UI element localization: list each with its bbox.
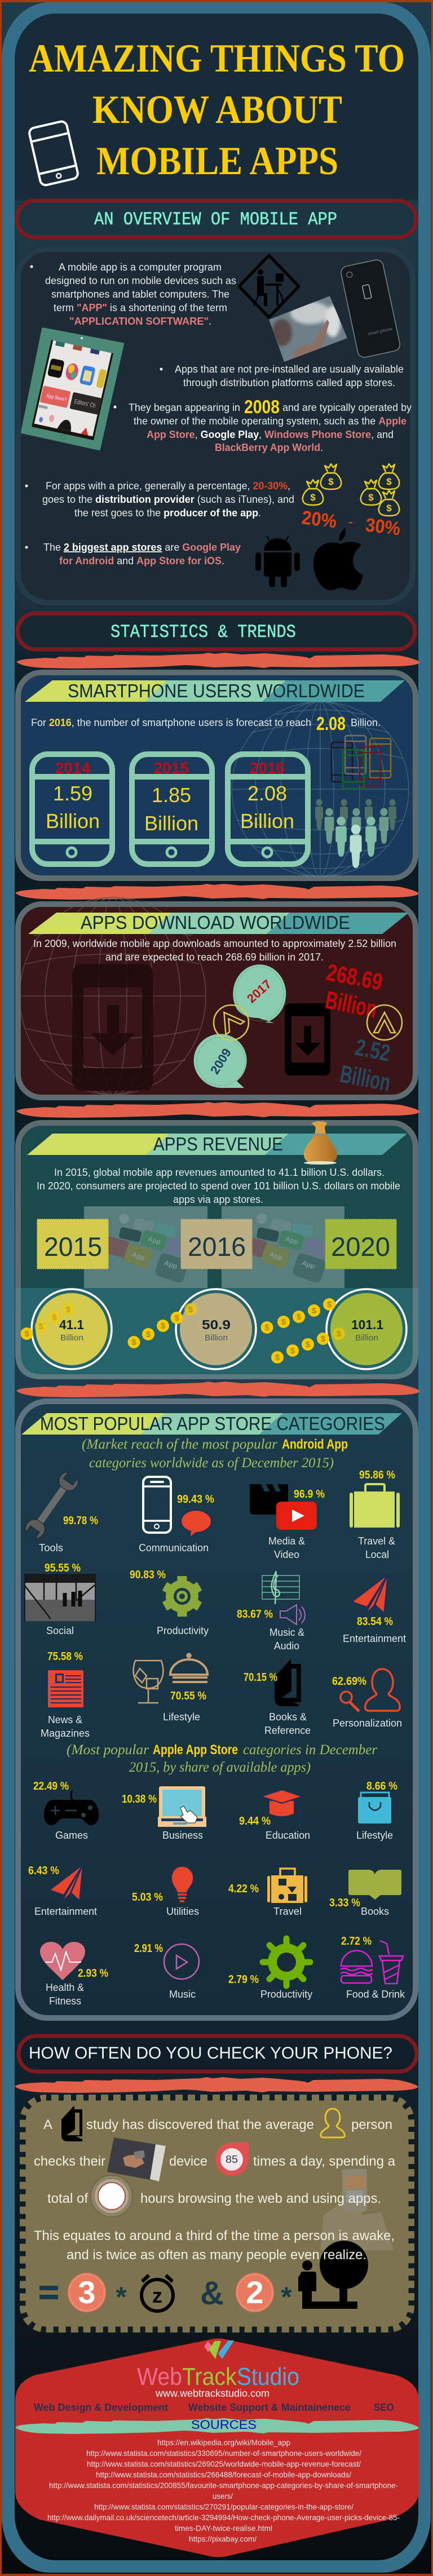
coins: dollar rows: $ xyxy=(275,1353,280,1362)
icon: orange money sack xyxy=(304,1121,337,1165)
icon: large phone with download arrow xyxy=(72,964,153,1091)
sentence line 3 with clock: total of xyxy=(47,2191,88,2206)
image: app keys 2: App xyxy=(285,1235,299,1246)
title line 3: MOBILE APPS xyxy=(96,139,338,183)
text block: definition: designed to run on mobile devices such as xyxy=(45,275,236,286)
ribbon heading: MOST POPULAR APP STORE CATEGORIES xyxy=(40,1413,385,1434)
icon: money bags and percentages: 30% xyxy=(364,514,401,539)
stat: 2.52 billion: Billion xyxy=(338,1060,393,1097)
item: travel apple: Travel xyxy=(273,1906,302,1917)
item: entertainment android xyxy=(343,1574,406,1644)
circle stat: 50.9 billion: Billion xyxy=(205,1333,228,1343)
balloon icon xyxy=(320,2241,368,2289)
forecast sentence xyxy=(31,713,381,734)
image: hand touching tablet xyxy=(269,296,347,366)
item: travel and local xyxy=(350,1469,400,1560)
text block: pricing: For apps with a price, generally a percentage, 20-30%, xyxy=(46,480,290,492)
title block xyxy=(29,37,405,183)
forecast sentence: Billion. xyxy=(351,717,381,728)
ribbon heading: APPS REVENUE xyxy=(153,1134,283,1154)
item: music apple: Music xyxy=(169,1989,196,2000)
item: games xyxy=(33,1780,99,1841)
title line 2: KNOW ABOUT xyxy=(92,88,342,132)
item: media and video: Video xyxy=(274,1549,299,1560)
sentence line 2 with icons xyxy=(34,2137,396,2181)
item: books and reference xyxy=(244,1659,311,1736)
item: music apple xyxy=(134,1942,199,2000)
year tag: 2015: 2015 xyxy=(44,1232,102,1262)
divider brush xyxy=(16,1102,420,1118)
coins: dollar rows: $ xyxy=(38,1322,43,1331)
item: utilities xyxy=(132,1866,199,1917)
icon: phone with download arrow xyxy=(285,1003,330,1075)
heading pill: statistics: STATISTICS & TRENDS xyxy=(111,622,296,643)
equation: 2 xyxy=(246,2274,264,2310)
revenue sentence: apps via app stores. xyxy=(173,1194,263,1205)
bubble: 2009 xyxy=(194,1034,247,1088)
services: Website Support & Maintainenece xyxy=(188,2402,351,2413)
item: productivity android: 90.83 % xyxy=(130,1569,166,1581)
icon: money bags and percentages: $ xyxy=(386,503,392,514)
item: travel and local: Travel & xyxy=(358,1535,395,1547)
coins: dollar rows: $ xyxy=(24,1329,29,1339)
year tag: 2016 xyxy=(181,1219,252,1269)
circle stat: 41.1 billion xyxy=(32,1289,112,1369)
sentence line 2 with icons: device xyxy=(169,2154,207,2169)
sentence line 3 with clock xyxy=(47,2175,381,2217)
item: tools: 99.78 % xyxy=(63,1515,98,1527)
item: health and fitness: 2.93 % xyxy=(78,1967,108,1980)
sentence line 2 with icons: times a day, spending a xyxy=(253,2154,396,2169)
text block: history 2008: App Store, Google Play, Windows Phone Store, and xyxy=(147,429,394,440)
sentence line 2 with icons: checks their xyxy=(34,2154,105,2169)
image: app keys 1: App xyxy=(164,1259,178,1271)
circle stat: 50.9 billion: 50.9 xyxy=(202,1317,231,1332)
phone stat: 2015: 2015 xyxy=(154,759,189,777)
equation: * xyxy=(116,2281,127,2313)
sources list xyxy=(47,2438,400,2543)
item: personalization: Personalization xyxy=(333,1718,402,1729)
sources list: http://www.dailymail.co.uk/sciencetech/article-3294994/How-check-phone-Average-user-picks-device-85- xyxy=(47,2513,400,2522)
item: productivity android: Productivity xyxy=(157,1625,209,1636)
circle stat: 50.9 billion xyxy=(176,1289,256,1369)
subtitle: android: Android App xyxy=(282,1437,348,1452)
revenue sentence: In 2020, consumers are projected to spend over 101 billion U.S. dollars on mobile xyxy=(37,1180,400,1192)
item: music and audio: 83.67 % xyxy=(237,1608,273,1621)
coins: dollar rows: $ xyxy=(146,1330,151,1339)
phone stat: 2014 xyxy=(32,754,112,864)
item: tools xyxy=(23,1470,98,1553)
item: books apple xyxy=(329,1870,401,1917)
item: health and fitness: Fitness xyxy=(49,1995,81,2007)
coins: dollar rows: $ xyxy=(290,1346,295,1356)
item: communication xyxy=(139,1477,214,1553)
sentence line 1 with icons xyxy=(43,2105,392,2141)
sources list: times-DAY-twice-realise.html xyxy=(175,2524,272,2533)
subtitle: android: (Market reach of the most popular xyxy=(82,1437,277,1452)
image: app keys 2: App xyxy=(301,1259,316,1271)
phone stat: 2016 xyxy=(228,754,308,864)
text block: biggest stores: for Android and App Store for iOS. xyxy=(59,555,224,566)
phone stat: 2016: 2.08 xyxy=(248,782,287,805)
services xyxy=(34,2402,394,2413)
forecast sentence: 2.08 xyxy=(316,713,346,734)
text block: pricing: goes to the distribution provider (such as iTunes), and xyxy=(42,494,294,505)
sentence line 4: This equates to around a third of the time a person is awake, xyxy=(34,2228,395,2243)
sources list: http://www.statista.com/statistics/266488/forecast-of-mobile-app-downloads/ xyxy=(96,2470,351,2479)
coins: dollar rows: $ xyxy=(297,1312,302,1322)
item: food and drink: Food & Drink xyxy=(346,1989,405,2000)
item: personalization xyxy=(332,1669,402,1729)
image: app keys 1 xyxy=(84,1206,207,1288)
item: books apple: Books xyxy=(361,1906,389,1917)
item: business: Business xyxy=(162,1830,203,1841)
image: green tablet showing app store: Editors' Ch xyxy=(74,398,96,410)
item: health and fitness xyxy=(40,1942,108,2007)
item: communication: 99.43 % xyxy=(177,1493,214,1506)
text block: biggest stores xyxy=(25,542,241,566)
sentence line 3 with clock: hours browsing the web and using apps. xyxy=(140,2191,381,2206)
equation xyxy=(39,2273,292,2313)
coins: dollar rows: $ xyxy=(52,1313,57,1322)
coins: dollar rows: $ xyxy=(281,1317,286,1327)
icon: yellow up chevron left xyxy=(214,1005,249,1040)
circle stat: 41.1 billion: 41.1 xyxy=(59,1317,84,1332)
circle stat: 101.1 billion: Billion xyxy=(355,1333,378,1343)
text block: app stores: Apps that are not pre-installed are usually available xyxy=(175,364,404,375)
item: education: Education xyxy=(266,1830,310,1841)
item: travel and local: 95.86 % xyxy=(359,1469,395,1481)
image: green tablet showing app store: App Store? xyxy=(46,393,67,402)
coins: dollar rows: $ xyxy=(327,1300,332,1309)
logo wordmark: WebTrackStudio xyxy=(137,2363,299,2391)
year tag: 2020: 2020 xyxy=(331,1232,390,1262)
divider brush xyxy=(16,1382,420,1397)
item: business xyxy=(122,1786,206,1841)
item: productivity apple: 2.79 % xyxy=(228,1973,259,1986)
lower band xyxy=(15,1288,418,1379)
item: media and video: 96.9 % xyxy=(294,1488,325,1501)
text block: history 2008: and are typically operated by xyxy=(282,402,412,413)
sentence line 5: and is twice as often as many people even realize. xyxy=(67,2247,366,2263)
text block: pricing: the rest goes to the producer of the app. xyxy=(74,507,261,519)
sentence line 1 with icons: A xyxy=(43,2117,52,2132)
subtitle: android xyxy=(82,1437,348,1471)
ribbon heading: SMARTPHONE USERS WORLDWIDE xyxy=(68,680,365,701)
revenue sentence xyxy=(37,1167,400,1205)
stat: 2.52 billion xyxy=(338,1034,393,1097)
coins: dollar rows: $ xyxy=(312,1306,317,1316)
text block: history 2008: the owner of the mobile operating system, such as the Apple xyxy=(134,415,407,427)
logo mark xyxy=(204,2340,234,2359)
icon: warning sign with person at desk xyxy=(239,255,299,317)
item: music and audio: Music & xyxy=(269,1627,304,1638)
item: communication: Communication xyxy=(139,1542,209,1553)
coins: dollar rows: $ xyxy=(66,1305,71,1314)
item: media and video: Media & xyxy=(268,1535,305,1547)
globe backdrop xyxy=(232,702,409,877)
item: news and magazines: 75.58 % xyxy=(47,1650,83,1663)
text block: pricing xyxy=(25,480,294,519)
item: books apple: 3.33 % xyxy=(329,1897,360,1909)
item: utilities: 5.03 % xyxy=(132,1891,163,1904)
divider brush xyxy=(15,2077,418,2093)
icon: money bags and percentages: $ xyxy=(386,476,392,487)
circle stat: 41.1 billion: Billion xyxy=(60,1333,83,1343)
panel: apps revenue xyxy=(15,1121,418,1379)
revenue sentence: In 2015, global mobile app revenues amounted to 41.1 billion U.S. dollars. xyxy=(54,1167,385,1178)
phone stat: 2015: 1.85 xyxy=(152,784,191,807)
phone stat: 2014: 1.59 xyxy=(53,782,92,805)
icon: money bags and percentages: $ xyxy=(310,492,316,503)
phone stat: 2016: Billion xyxy=(240,809,294,833)
sources list: http://www.statista.com/statistics/270291/popular-categories-in-the-app-store/ xyxy=(94,2502,354,2511)
image: app keys 2: App xyxy=(268,1250,284,1262)
bubble: 2009: 2009 xyxy=(207,1046,234,1077)
coins: dollar rows: $ xyxy=(131,1338,136,1347)
image: black smartphone back xyxy=(340,259,401,358)
equation: & xyxy=(200,2275,224,2312)
panel: apps download xyxy=(18,897,416,1097)
item: entertainment android: 83.54 % xyxy=(357,1615,393,1628)
panel: most popular categories xyxy=(18,1401,416,2018)
text block: definition: A mobile app is a computer program xyxy=(59,262,222,273)
website: www.webtrackstudio.com xyxy=(155,2388,269,2399)
divider brush xyxy=(15,884,419,900)
item: travel apple xyxy=(228,1869,307,1917)
icon: money bags and percentages: $ xyxy=(328,476,334,487)
coins: dollar rows: $ xyxy=(321,1334,326,1344)
coins: dollar rows: $ xyxy=(264,1323,269,1333)
text block: history 2008: 2008 xyxy=(244,396,280,417)
year tag: 2015 xyxy=(37,1219,108,1269)
panel: footer xyxy=(15,2338,419,2557)
item: lifestyle android: 70.55 % xyxy=(170,1690,206,1702)
heading pill: overview: AN OVERVIEW OF MOBILE APP xyxy=(94,209,337,230)
item: books and reference: Reference xyxy=(264,1725,311,1736)
equation: * xyxy=(281,2281,292,2313)
item: books and reference: 70.15 % xyxy=(244,1671,277,1684)
equation: 3 xyxy=(78,2274,96,2310)
panel: how often xyxy=(20,2095,414,2332)
item: education xyxy=(239,1790,310,1841)
item: news and magazines: Magazines xyxy=(41,1728,90,1739)
item: lifestyle apple: Lifestyle xyxy=(356,1830,393,1841)
image: hands holding phone xyxy=(320,2169,394,2250)
text block: history 2008: They began appearing in xyxy=(129,402,240,413)
stat: 268.69 billion: Billion xyxy=(323,986,379,1023)
sources brush xyxy=(15,2418,419,2434)
icon: cluster of coloured phones xyxy=(332,736,391,789)
item: social: 95.55 % xyxy=(45,1562,81,1574)
services: SEO xyxy=(374,2402,394,2413)
heading pill: how often xyxy=(19,2036,417,2072)
item: social xyxy=(24,1562,96,1636)
sources list: https://pixabay.com/ xyxy=(189,2534,257,2543)
item: food and drink: 2.72 % xyxy=(341,1935,372,1948)
sentence line 1 with icons: person xyxy=(351,2117,392,2132)
image: app keys 1: App xyxy=(147,1235,162,1246)
image: black smartphone back: smart phone xyxy=(367,326,393,337)
sources list: users/ xyxy=(213,2491,233,2500)
phone stat: 2015: Billion xyxy=(144,812,198,835)
coins: dollar rows: $ xyxy=(174,1313,179,1323)
item: productivity apple: Productivity xyxy=(260,1989,312,2000)
image: app keys 2 xyxy=(222,1206,344,1288)
download sentence: In 2009, worldwide mobile app downloads amounted to approximately 2.52 billion xyxy=(33,938,396,949)
year tag: 2016: 2016 xyxy=(188,1232,246,1262)
item: food and drink xyxy=(341,1935,405,2000)
globe backdrop xyxy=(20,897,206,1095)
bubble: 2017 xyxy=(233,964,286,1023)
sources list: http://www.statista.com/statistics/330695/number-of-smartphone-users-worldwide/ xyxy=(86,2449,361,2458)
item: productivity android xyxy=(130,1569,209,1636)
item: music apple: 2.91 % xyxy=(134,1942,163,1955)
item: entertainment apple: Entertainment xyxy=(34,1906,97,1917)
coins: dollar rows xyxy=(20,1298,345,1364)
item: lifestyle apple xyxy=(356,1780,397,1841)
item: lifestyle apple: 8.66 % xyxy=(366,1780,397,1792)
download sentence xyxy=(33,938,396,963)
text block: biggest stores: The 2 biggest app stores are Google Play xyxy=(43,542,241,553)
heading pill: overview xyxy=(17,201,416,237)
item: music and audio: Audio xyxy=(274,1640,299,1652)
subtitle: apple: categories in December xyxy=(243,1742,377,1758)
item: news and magazines xyxy=(41,1650,90,1739)
phone stat: 2014: 2014 xyxy=(55,759,91,777)
icon: money bags and percentages: 20% xyxy=(301,507,338,532)
heading pill: how often: HOW OFTEN DO YOU CHECK YOUR PHONE? xyxy=(29,2044,392,2062)
divider brush xyxy=(16,653,420,669)
coins: dollar rows: $ xyxy=(337,1329,342,1339)
year tag: 2020 xyxy=(325,1219,396,1269)
stat: 268.69 billion: 268.69 xyxy=(324,959,385,995)
subtitle: apple: 2015, by share of available apps) xyxy=(129,1760,311,1775)
icon: money bags and percentages xyxy=(301,464,401,539)
icon: yellow up chevron right xyxy=(367,1005,402,1040)
panel: smartphone users xyxy=(18,672,416,878)
subtitle: apple xyxy=(67,1742,377,1775)
text block: definition xyxy=(30,262,236,327)
item: media and video xyxy=(250,1484,325,1560)
heading pill: statistics xyxy=(17,613,415,649)
image: green tablet showing app store xyxy=(22,329,123,449)
item: education: 9.44 % xyxy=(239,1815,271,1827)
item: social: Social xyxy=(46,1625,74,1636)
item: games: Games xyxy=(55,1830,88,1841)
coins: dollar rows: $ xyxy=(306,1340,311,1349)
services: Web Design & Development xyxy=(34,2402,168,2413)
image: app keys 1: App xyxy=(131,1250,146,1262)
stat: 2.52 billion: 2.52 xyxy=(353,1034,392,1066)
item: entertainment apple: 6.43 % xyxy=(28,1865,59,1877)
icon: group of people xyxy=(315,799,396,868)
circle stat: 101.1 billion: 101.1 xyxy=(351,1317,383,1332)
forecast sentence: For 2016, the number of smartphone users is forecast to reach xyxy=(31,717,311,728)
icon: apple logo xyxy=(313,528,363,590)
item: personalization: 62.69% xyxy=(332,1675,366,1688)
phone stat: 2016: 2016 xyxy=(250,759,285,777)
sources list: http://www.statista.com/statistics/200855/favourite-smartphone-app-categories-by-share-of-smartphone- xyxy=(49,2481,398,2490)
item: productivity apple xyxy=(228,1938,312,2000)
equation: z xyxy=(152,2284,162,2307)
icon: white phone outline xyxy=(28,121,79,186)
text block: app stores xyxy=(160,364,404,388)
coins: dollar rows: $ xyxy=(188,1305,193,1314)
item: tools: Tools xyxy=(39,1542,63,1553)
ribbon heading: APPS DOWNLOAD WORLDWIDE xyxy=(81,912,350,933)
item: travel apple: 4.22 % xyxy=(228,1883,259,1895)
coins: dollar rows: $ xyxy=(161,1321,166,1331)
sources heading: SOURCES xyxy=(191,2418,257,2432)
sources list: https://en.wikipedia.org/wiki/Mobile_app xyxy=(157,2438,290,2447)
text block: history 2008 xyxy=(114,396,412,453)
subtitle: apple: (Most popular xyxy=(67,1742,149,1758)
sources list: http://www.statista.com/statistics/269025/worldwide-mobile-app-revenue-forecast/ xyxy=(87,2459,361,2468)
text block: history 2008: BlackBerry App World. xyxy=(215,442,323,453)
text block: definition: "APPLICATION SOFTWARE". xyxy=(69,316,211,327)
download sentence: and are expected to reach 268.69 billion in 2017. xyxy=(105,951,324,963)
item: games: 22.49 % xyxy=(33,1780,69,1792)
icon: android robot xyxy=(255,536,300,587)
item: health and fitness: Health & xyxy=(46,1982,84,1993)
item: entertainment apple xyxy=(28,1865,97,1917)
stat: 268.69 billion xyxy=(323,959,385,1023)
circle stat: 101.1 billion xyxy=(326,1289,407,1369)
item: business: 10.38 % xyxy=(122,1793,157,1805)
item: books and reference: Books & xyxy=(269,1711,307,1723)
item: utilities: Utilities xyxy=(166,1906,199,1917)
item: lifestyle android: Lifestyle xyxy=(163,1711,200,1723)
item: lifestyle android xyxy=(133,1654,207,1723)
ribbon heading xyxy=(27,1134,407,1155)
item: entertainment android: Entertainment xyxy=(343,1633,406,1644)
subtitle: apple: Apple App Store xyxy=(153,1742,238,1758)
bubble: 2017: 2017 xyxy=(244,977,274,1006)
sentence line 1 with icons: study has discovered that the average xyxy=(86,2117,314,2132)
item: travel and local: Local xyxy=(365,1549,389,1560)
icon: person at table xyxy=(298,2260,357,2309)
text block: definition: smartphones and tablet computers. The xyxy=(51,289,229,300)
icon: money bags and percentages: $ xyxy=(368,492,374,503)
item: music and audio xyxy=(237,1571,305,1652)
sentence line 2 with icons: 85 xyxy=(226,2154,238,2165)
panel: overview xyxy=(18,249,413,603)
phone stat: 2015 xyxy=(132,754,212,864)
text block: definition: term "APP" is a shortening of the term xyxy=(54,302,227,313)
item: news and magazines: News & xyxy=(48,1714,82,1725)
subtitle: android: categories worldwide as of December 2015) xyxy=(89,1455,334,1471)
text block: app stores: through distribution platforms called app stores. xyxy=(183,377,395,388)
phone stat: 2014: Billion xyxy=(46,809,100,833)
